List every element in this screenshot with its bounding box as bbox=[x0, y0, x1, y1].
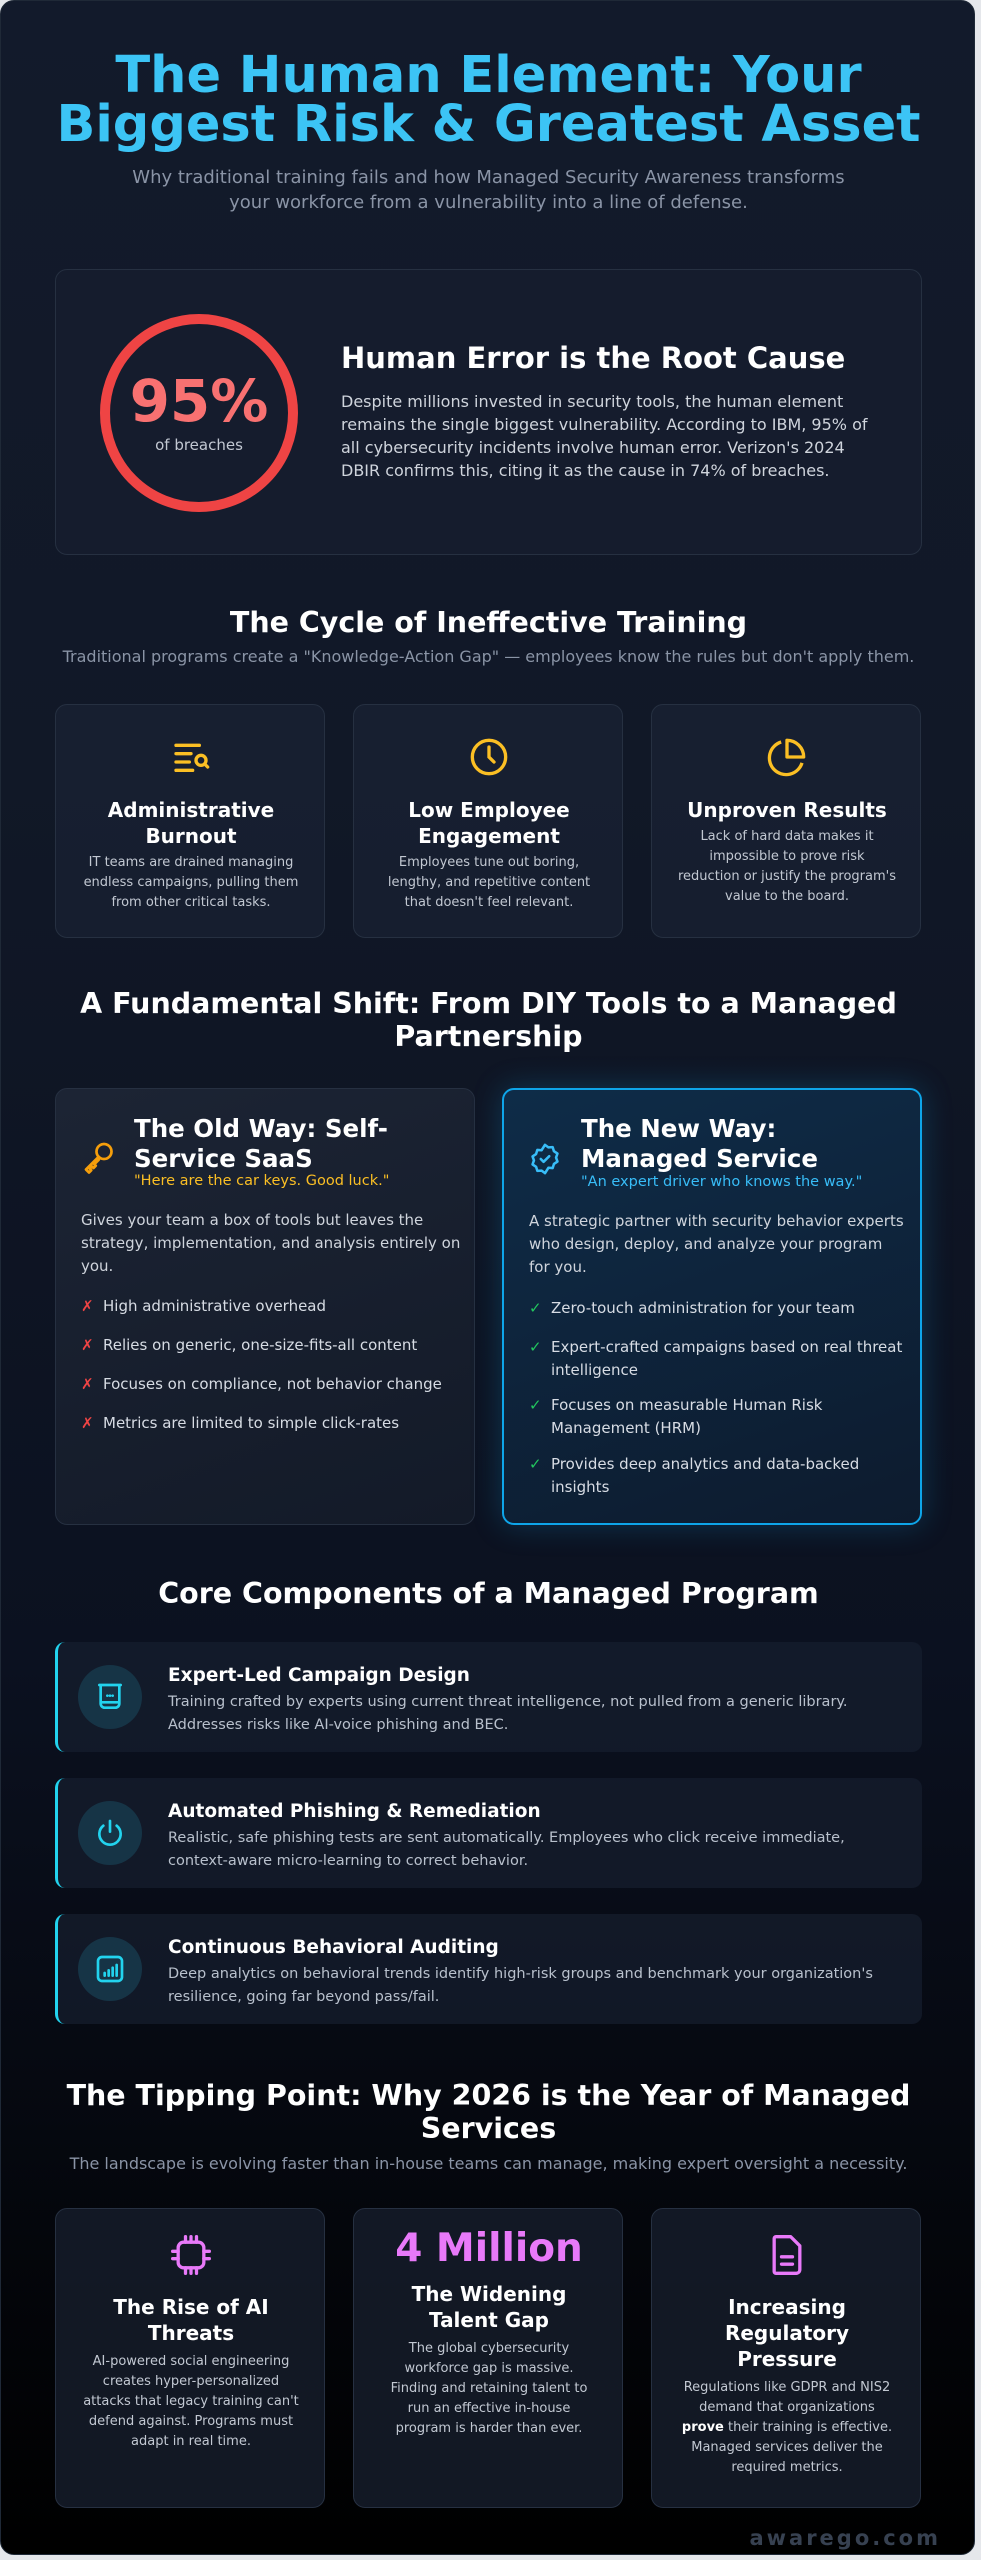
old way list: Relies on generic, one-size-fits-all content bbox=[103, 1336, 417, 1354]
icon: badge check bbox=[531, 1144, 559, 1174]
icon: power bbox=[78, 1801, 142, 1865]
panel: hero stat bbox=[55, 269, 922, 555]
subheading: tipping point: The landscape is evolving faster than in-house teams can manage, making expert oversight a necessity. bbox=[70, 2154, 907, 2173]
old way text: Gives your team a box of tools but leaves the strategy, implementation, and analysis entirely on you. bbox=[81, 1211, 460, 1275]
component: behavioral auditing: Continuous Behavioral Auditing bbox=[168, 1937, 499, 1958]
card: talent gap: The Widening Talent Gap bbox=[412, 2282, 566, 2332]
new way heading bbox=[581, 1114, 818, 1173]
icon: key bbox=[84, 1142, 113, 1174]
component: behavioral auditing: Deep analytics on behavioral trends identify high-risk groups and benchmark your organization's resilience, going far beyond pass/fail. bbox=[168, 1966, 873, 2005]
footer: brand: awarego.com bbox=[749, 2526, 941, 2550]
stat circle 95%: 95% bbox=[130, 367, 268, 435]
new way heading: The New Way: bbox=[581, 1114, 776, 1143]
old way list: ✗ bbox=[81, 1375, 94, 1393]
component: expert-led design: Training crafted by experts using current threat intelligence, not pulled from a generic library. Addresses risks like AI-voice phishing and BEC. bbox=[168, 1694, 848, 1733]
card: administrative burnout: IT teams are drained managing endless campaigns, pulling them from other critical tasks. bbox=[84, 855, 298, 910]
component: expert-led design: Expert-Led Campaign Design bbox=[168, 1665, 470, 1686]
new way list: ✓ bbox=[529, 1299, 542, 1317]
stat: 4 million: 4 Million bbox=[395, 2226, 583, 2271]
hero heading: Human Error is the Root Cause bbox=[341, 341, 845, 375]
new way list: Focuses on measurable Human Risk Management (HRM) bbox=[551, 1396, 822, 1437]
title: Biggest Risk & Greatest Asset bbox=[56, 95, 921, 154]
panel: old way: "Here are the car keys. Good luck." bbox=[134, 1173, 389, 1189]
new way text: A strategic partner with security behavior experts who design, deploy, and analyze your program for you. bbox=[529, 1212, 904, 1276]
icon: pie chart bbox=[768, 738, 806, 776]
panel: old way bbox=[55, 1088, 475, 1525]
card: regulatory pressure: Increasing Regulatory Pressure bbox=[725, 2295, 849, 2371]
card: AI threats bbox=[55, 2208, 325, 2508]
icon: clock bbox=[470, 738, 508, 776]
new way list: Zero-touch administration for your team bbox=[551, 1299, 855, 1317]
icon: document bbox=[78, 1665, 142, 1729]
component: behavioral auditing bbox=[55, 1914, 922, 2024]
new way list: ✓ bbox=[529, 1338, 542, 1356]
new way list: Expert-crafted campaigns based on real threat intelligence bbox=[551, 1338, 902, 1379]
component: automated phishing: Realistic, safe phishing tests are sent automatically. Employees who click receive immediate, context-aware micro-learning to correct behavior. bbox=[168, 1830, 845, 1869]
old way list: ✗ bbox=[81, 1414, 94, 1432]
hero text: Despite millions invested in security tools, the human element remains the single biggest vulnerability. According to IBM, 95% of all cybersecurity incidents involve human error. Verizon's 2024 DBIR confirms this, citing it as the cause in 74% of breaches. bbox=[341, 392, 867, 480]
old way heading bbox=[134, 1114, 388, 1173]
old way heading: Service SaaS bbox=[134, 1144, 313, 1173]
card: administrative burnout bbox=[55, 704, 325, 938]
card: administrative burnout: Administrative Burnout bbox=[108, 798, 274, 848]
new way heading: Managed Service bbox=[581, 1144, 818, 1173]
panel: new way bbox=[502, 1088, 922, 1525]
new way list: ✓ bbox=[529, 1396, 542, 1414]
heading: fundamental shift: A Fundamental Shift: From DIY Tools to a Managed Partnership bbox=[80, 987, 897, 1053]
stat circle 95%: of breaches bbox=[155, 436, 243, 454]
card: AI threats: AI-powered social engineering creates hyper-personalized attacks that legacy training can't defend against. Programs must adapt in real time. bbox=[83, 2354, 299, 2449]
old way heading: The Old Way: Self- bbox=[134, 1114, 388, 1143]
heading: tipping point: The Tipping Point: Why 2026 is the Year of Managed Services bbox=[67, 2079, 910, 2145]
card: regulatory pressure: Regulations like GDPR and NIS2 demand that organizations prove their training is effective. Managed services deliver the required metrics. bbox=[682, 2380, 892, 2475]
heading: cycle: The Cycle of Ineffective Training bbox=[230, 606, 747, 639]
icon: file bbox=[772, 2235, 802, 2275]
stat circle 95% bbox=[100, 314, 298, 512]
card: talent gap bbox=[353, 2208, 623, 2508]
icon: bar chart bbox=[78, 1937, 142, 2001]
panel: new way: "An expert driver who knows the way." bbox=[581, 1174, 862, 1190]
old way list: ✗ bbox=[81, 1297, 94, 1315]
old way list: High administrative overhead bbox=[103, 1297, 326, 1315]
new way list: ✓ bbox=[529, 1455, 542, 1473]
card: low engagement bbox=[353, 704, 623, 938]
old way list: ✗ bbox=[81, 1336, 94, 1354]
subtitle: Why traditional training fails and how Managed Security Awareness transforms your workforce from a vulnerability into a line of defense. bbox=[132, 167, 845, 213]
subheading: cycle: Traditional programs create a "Knowledge-Action Gap" — employees know the rules but don't apply them. bbox=[63, 647, 914, 666]
card: unproven results: reduction or justify the program's bbox=[678, 869, 896, 884]
card: low engagement: Low Employee Engagement bbox=[408, 798, 570, 848]
component: automated phishing: Automated Phishing & Remediation bbox=[168, 1801, 541, 1822]
new way list: Provides deep analytics and data-backed insights bbox=[551, 1455, 859, 1496]
new way list bbox=[529, 1299, 902, 1496]
card: unproven results bbox=[651, 704, 921, 938]
component: automated phishing bbox=[55, 1778, 922, 1888]
old way list bbox=[81, 1297, 442, 1432]
icon: chip bbox=[171, 2235, 211, 2275]
card: unproven results: Lack of hard data makes it bbox=[700, 829, 874, 844]
title: The Human Element: Your bbox=[115, 46, 862, 105]
card: regulatory pressure bbox=[651, 2208, 921, 2508]
card: talent gap: The global cybersecurity workforce gap is massive. Finding and retaining talent to run an effective in-house program is harder than ever. bbox=[391, 2341, 587, 2436]
card: low engagement: Employees tune out boring, lengthy, and repetitive content that doesn't feel relevant. bbox=[388, 855, 590, 910]
title bbox=[56, 46, 921, 154]
card: AI threats: The Rise of AI Threats bbox=[113, 2295, 269, 2345]
component: expert-led design bbox=[55, 1642, 922, 1752]
card: unproven results: impossible to prove risk bbox=[709, 849, 865, 864]
heading: core components: Core Components of a Managed Program bbox=[158, 1577, 819, 1610]
icon: list search bbox=[174, 744, 210, 772]
old way list: Metrics are limited to simple click-rates bbox=[103, 1414, 399, 1432]
card: unproven results: value to the board. bbox=[725, 889, 849, 904]
card: unproven results: Unproven Results bbox=[687, 798, 887, 822]
old way list: Focuses on compliance, not behavior change bbox=[103, 1375, 442, 1393]
